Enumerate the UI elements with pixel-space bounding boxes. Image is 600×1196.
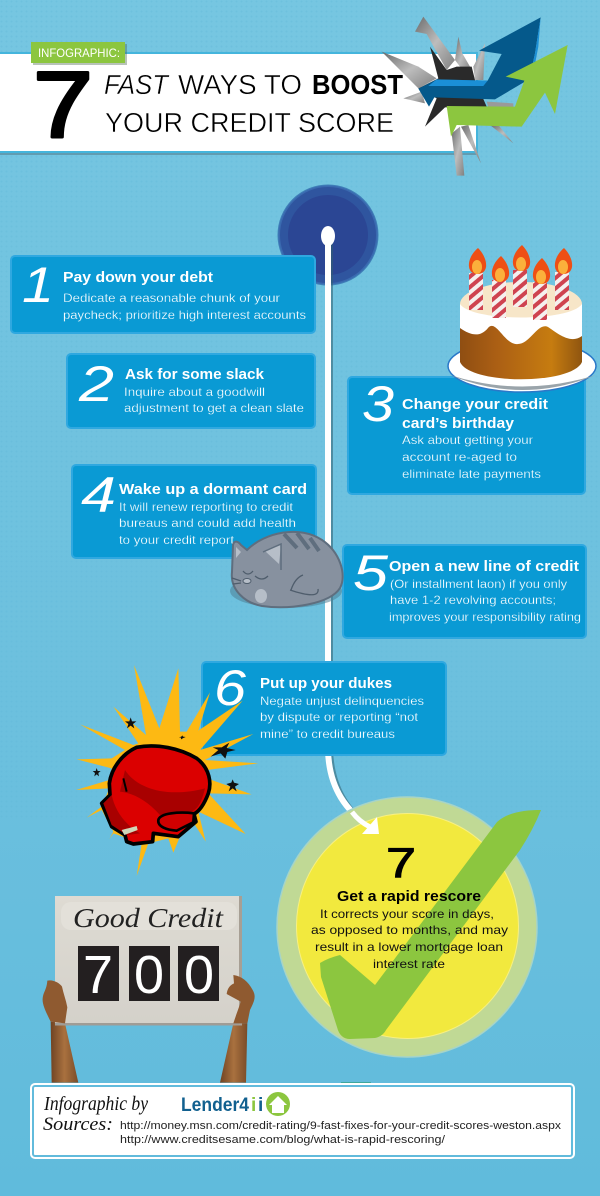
hands <box>43 975 255 1023</box>
panel: step 6 <box>202 660 446 755</box>
glove <box>102 746 210 844</box>
panel: step 6: Put up your dukes <box>260 676 392 692</box>
step 7 text: It corrects your score in days, <box>320 907 494 921</box>
timeline arrow <box>321 226 379 833</box>
score 700: 0 <box>134 945 164 1005</box>
score 700: 0 <box>184 945 214 1005</box>
icon: hands holding good credit sign <box>43 896 255 1083</box>
panel: step 4 <box>72 465 316 558</box>
title banner <box>0 42 477 157</box>
logo: Lender4 <box>181 1092 290 1116</box>
logo: Lender4: i <box>258 1095 263 1116</box>
panel: step 6: by dispute or reporting “not <box>260 710 419 724</box>
panel: step 5: have 1-2 revolving accounts; <box>390 593 556 607</box>
step 7 text <box>311 839 508 971</box>
panel: step 4: Wake up a dormant card <box>119 482 307 498</box>
icon: birthday cake <box>448 245 596 392</box>
panel: step 6: 6 <box>214 660 246 716</box>
panel: step 2 <box>67 354 315 428</box>
title text: WAYS TO <box>178 69 302 100</box>
panel: step 3 <box>348 376 585 494</box>
step 7 text: 7 <box>386 839 416 886</box>
panel: step 3: Ask about getting your <box>402 433 533 447</box>
teal tab behind footer <box>341 1082 371 1086</box>
panel: step 3: account re-aged to <box>402 450 517 464</box>
score 700 <box>78 945 219 1005</box>
arms <box>51 1022 247 1083</box>
panel: step 3: Change your credit <box>402 397 548 413</box>
candles <box>469 270 569 320</box>
step 7 text: interest rate <box>373 957 445 971</box>
footer: credits and sources: http://www.creditsesame.com/blog/what-is-rapid-rescoring/ <box>120 1134 446 1146</box>
title text <box>104 69 403 138</box>
icon: arrows bursting through wall <box>382 17 568 176</box>
panel: step 3: card’s birthday <box>402 416 514 432</box>
panel: step 5: 5 <box>353 545 388 601</box>
panel: step 4: to your credit report <box>119 533 235 547</box>
start circle <box>278 185 378 285</box>
big numeral 7: 7 <box>33 52 93 157</box>
stars <box>93 717 239 791</box>
tag: infographic <box>31 42 127 65</box>
panel: step 4: It will renew reporting to credit <box>119 500 294 514</box>
panel: step 2: Inquire about a goodwill <box>124 385 265 399</box>
panel: step 7 circle <box>277 797 541 1057</box>
title text: FAST <box>104 69 170 100</box>
panel: step 1: 1 <box>22 257 54 313</box>
panel: step 5: (Or installment laon) if you only <box>390 577 567 591</box>
panel: step 1: paycheck; prioritize high interest accounts <box>63 308 306 322</box>
title text: BOOST <box>312 69 403 100</box>
panel: step 3: eliminate late payments <box>402 467 541 481</box>
panel: step 4: 4 <box>81 467 116 523</box>
step 7 text: result in a lower mortgage loan <box>315 940 503 954</box>
panel: step 2: Ask for some slack <box>125 367 265 383</box>
footer: credits and sources <box>31 1084 574 1158</box>
panel: step 2: 2 <box>78 356 114 412</box>
panel: step 4: bureaus and could add health <box>119 516 296 530</box>
icon: sleeping cat <box>230 532 343 608</box>
sign heading: Good Credit <box>73 903 225 933</box>
panel: step 5 <box>343 545 586 638</box>
burst <box>76 665 258 876</box>
icon: burst with boxing glove <box>76 665 258 876</box>
panel: step 5: improves your responsibility rating <box>389 610 581 624</box>
tag: infographic: INFOGRAPHIC: <box>38 46 120 60</box>
panel: step 6: mine” to credit bureaus <box>260 727 395 741</box>
panel: step 1 <box>11 256 315 333</box>
step 7 text: Get a rapid rescore <box>337 889 481 905</box>
panel: step 3: 3 <box>362 376 394 432</box>
title text: YOUR CREDIT SCORE <box>105 107 394 138</box>
footer: credits and sources: http://money.msn.com/credit-rating/9-fast-fixes-for-your-credit-scores-weston.aspx <box>120 1120 562 1132</box>
logo: Lender4: Lender4 <box>181 1095 249 1116</box>
arrowhead over circle <box>352 812 379 834</box>
panel: step 5: Open a new line of credit <box>389 559 579 575</box>
footer: credits and sources: Sources: <box>43 1114 113 1135</box>
panel: step 2: adjustment to get a clean slate <box>124 401 304 415</box>
logo: Lender4: i <box>251 1095 256 1116</box>
footer: credits and sources: Infographic by <box>43 1093 148 1115</box>
score 700: 7 <box>83 945 113 1005</box>
panel: step 6: Negate unjust delinquencies <box>260 694 424 708</box>
panel: step 1: Pay down your debt <box>63 270 213 286</box>
flames <box>469 245 572 284</box>
sign board <box>55 896 242 1025</box>
panel: step 1: Dedicate a reasonable chunk of your <box>63 291 280 305</box>
step 7 text: as opposed to months, and may <box>311 923 508 937</box>
icon: check mark <box>320 810 541 1039</box>
